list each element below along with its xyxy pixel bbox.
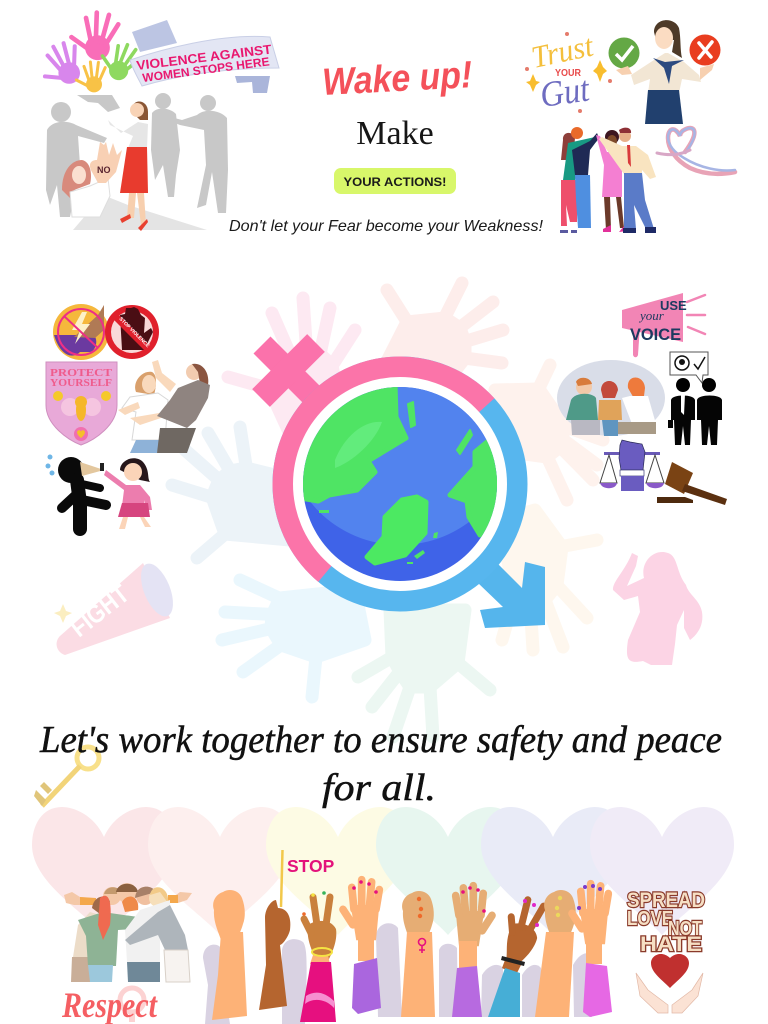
your actions button (334, 168, 456, 194)
fear tagline: Don't let your Fear become your Weakness! (229, 218, 544, 235)
heart in hands (636, 954, 703, 1013)
grey shadow figures (46, 93, 228, 230)
group hug (64, 883, 192, 982)
stop placard (281, 850, 335, 907)
badge: protect yourself: YOURSELF (50, 378, 112, 389)
black attacker silhouette (58, 457, 106, 529)
male arrow (478, 562, 545, 628)
arm: peace with pink sleeve (300, 897, 336, 1022)
arm: fist with female symbol (401, 891, 435, 1017)
closing message (39, 719, 722, 809)
stop placard: STOP (287, 856, 335, 876)
trust your gut lettering: Trust (528, 27, 597, 75)
ring (235, 319, 565, 649)
make text: Make (356, 115, 434, 152)
banner: violence against women stops here (130, 20, 279, 93)
female cross (261, 343, 322, 405)
badge: protect yourself (46, 362, 117, 445)
use your voice megaphone (622, 293, 705, 357)
key (34, 747, 99, 806)
use your voice megaphone: your (638, 308, 665, 323)
arm: peach fist (212, 890, 247, 1020)
faded fight megaphone: FIGHT (64, 578, 135, 643)
awareness ribbon heart (657, 128, 735, 174)
arm: open with pink sleeve (572, 884, 612, 1017)
woman in red skirt (108, 102, 148, 231)
badge: protect yourself: PROTECT (50, 368, 112, 379)
handprints (36, 10, 143, 92)
arm: open with purple sleeve (343, 880, 381, 1014)
woman with spray (104, 458, 152, 529)
faded fight megaphone (54, 559, 180, 655)
couple struggling (118, 360, 210, 453)
banner: violence against women stops here: VIOLENCE AGAINST (136, 42, 272, 73)
trust your gut lettering (525, 27, 612, 115)
globe (293, 377, 507, 591)
trust your gut lettering: YOUR (555, 67, 581, 79)
trust your gut lettering: Gut (538, 68, 593, 115)
business men with speech bubble (668, 352, 722, 445)
icon: no violence fist badge (53, 304, 109, 360)
spread love not hate lettering: LOVE (627, 908, 673, 930)
row of hearts (32, 807, 734, 935)
raised arms (212, 880, 612, 1022)
girl raising hand with NO (62, 142, 122, 217)
respect lettering: Respect (61, 985, 158, 1024)
use your voice megaphone: VOICE (630, 325, 681, 344)
arm: open with violet sleeve (452, 886, 492, 1017)
support group illustration (557, 360, 665, 436)
pink woman silhouette (613, 552, 702, 665)
gender symbol globe (252, 334, 545, 628)
spread love not hate lettering (627, 889, 705, 956)
spread love not hate lettering: SPREAD (627, 889, 705, 912)
your actions button: YOUR ACTIONS! (344, 177, 446, 189)
icon: stop violence hand: STOP VIOLENCE (118, 316, 151, 349)
use your voice megaphone: USE (660, 298, 687, 313)
arm: fist peach yellow nails (535, 890, 576, 1017)
icon: cross (690, 34, 720, 66)
wake up heading: Wake up! (321, 54, 473, 104)
justice scales with fist (600, 440, 664, 491)
high five group (560, 127, 656, 233)
girl with check and cross (608, 20, 720, 124)
faded ring of hands (172, 283, 603, 737)
icon: check (608, 38, 640, 68)
closing message: Let's work together to ensure safety and peace (39, 719, 722, 761)
arm: brown fist (259, 900, 290, 1010)
man sprayed by woman (46, 454, 152, 529)
gavel (657, 462, 727, 505)
banner: violence against women stops here: WOMEN STOPS HERE (142, 54, 270, 85)
spread love not hate lettering: NOT (668, 918, 702, 940)
arm: brown peace with blue sleeve (488, 896, 549, 1017)
girl raising hand with NO: NO (97, 165, 110, 175)
spread love not hate lettering: HATE (640, 933, 702, 956)
top-left: violence against women illustration (36, 10, 279, 231)
lilac background arms (203, 923, 592, 1024)
icon: stop violence hand (105, 305, 159, 359)
closing message: for all. (322, 767, 436, 809)
nail polish details (302, 880, 602, 927)
